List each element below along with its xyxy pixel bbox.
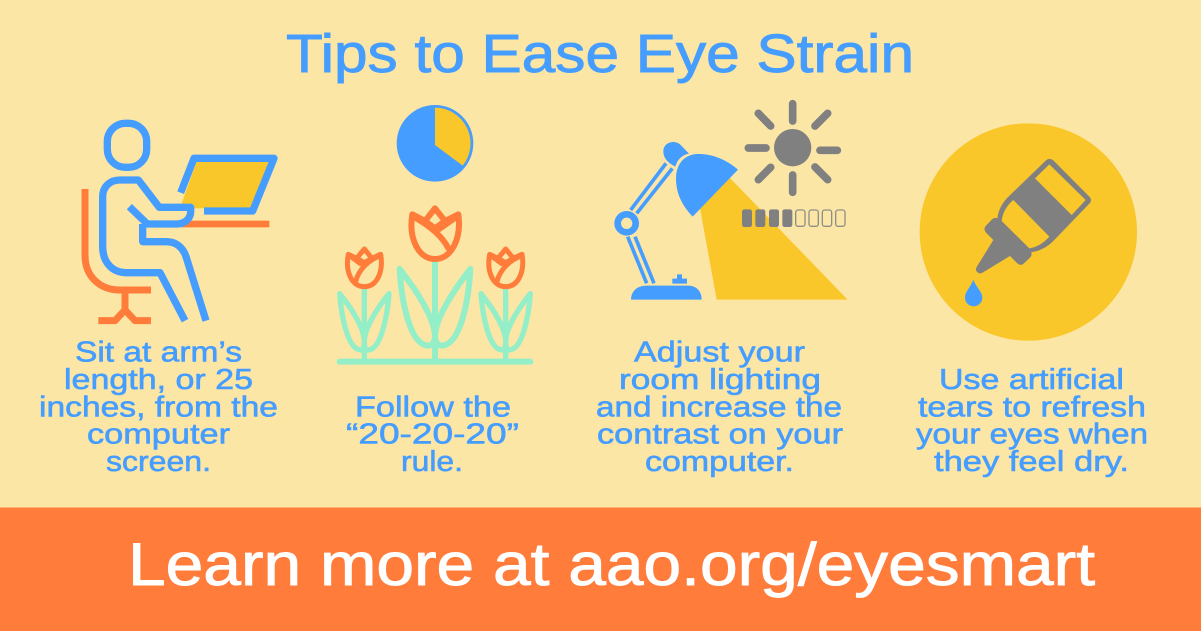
caption: adjust room lighting: and increase the bbox=[596, 392, 842, 424]
icon: desk lamp, sun and contrast bars bbox=[618, 104, 848, 300]
caption: 20-20-20 rule: Follow the bbox=[355, 392, 511, 424]
desk bbox=[182, 214, 269, 234]
pie chart bbox=[397, 105, 473, 182]
yellow circle bbox=[920, 123, 1137, 341]
footer call to action: Learn more at aao.org/eyesmart bbox=[128, 531, 1095, 598]
laptop outline bbox=[181, 158, 274, 211]
caption: adjust room lighting: contrast on your bbox=[597, 418, 844, 450]
caption: 20-20-20 rule bbox=[346, 392, 519, 478]
contrast bars bbox=[742, 209, 845, 227]
caption: sit at arm's length: screen. bbox=[106, 446, 211, 478]
head bbox=[107, 123, 147, 167]
icon: person sitting at computer bbox=[85, 123, 274, 321]
caption: adjust room lighting bbox=[596, 337, 844, 478]
caption: sit at arm's length bbox=[39, 337, 278, 478]
caption: adjust room lighting: computer. bbox=[645, 446, 794, 478]
icon: clock pie and tulips bbox=[340, 105, 530, 362]
caption: artificial tears: Use artificial bbox=[939, 364, 1124, 396]
caption: sit at arm's length: length, or 25 bbox=[64, 364, 253, 396]
laptop screen fill bbox=[182, 162, 269, 208]
sun bbox=[748, 104, 837, 192]
stems and leaves bbox=[340, 260, 530, 362]
caption: adjust room lighting: room lighting bbox=[619, 364, 821, 396]
caption: sit at arm's length: Sit at arm’s bbox=[75, 337, 242, 369]
caption: 20-20-20 rule: “20-20-20” bbox=[346, 418, 519, 450]
chair bbox=[85, 189, 151, 321]
water drop bbox=[965, 280, 982, 306]
caption: sit at arm's length: inches, from the bbox=[39, 392, 278, 424]
body bbox=[103, 180, 206, 321]
light beam bbox=[700, 177, 848, 300]
footer banner bbox=[0, 508, 1201, 631]
caption: adjust room lighting: Adjust your bbox=[634, 337, 806, 369]
caption: artificial tears: they feel dry. bbox=[934, 446, 1129, 478]
caption: artificial tears: your eyes when bbox=[916, 418, 1148, 450]
lamp bbox=[618, 142, 738, 300]
caption: artificial tears: tears to refresh bbox=[918, 392, 1146, 424]
icon: eye drop bottle bbox=[920, 123, 1137, 341]
caption: artificial tears bbox=[916, 364, 1148, 478]
caption: 20-20-20 rule: rule. bbox=[401, 446, 463, 478]
bottle bbox=[976, 159, 1091, 273]
tulip blooms bbox=[347, 208, 523, 287]
caption: sit at arm's length: computer bbox=[87, 418, 231, 450]
title: Tips to Ease Eye Strain bbox=[286, 24, 914, 84]
